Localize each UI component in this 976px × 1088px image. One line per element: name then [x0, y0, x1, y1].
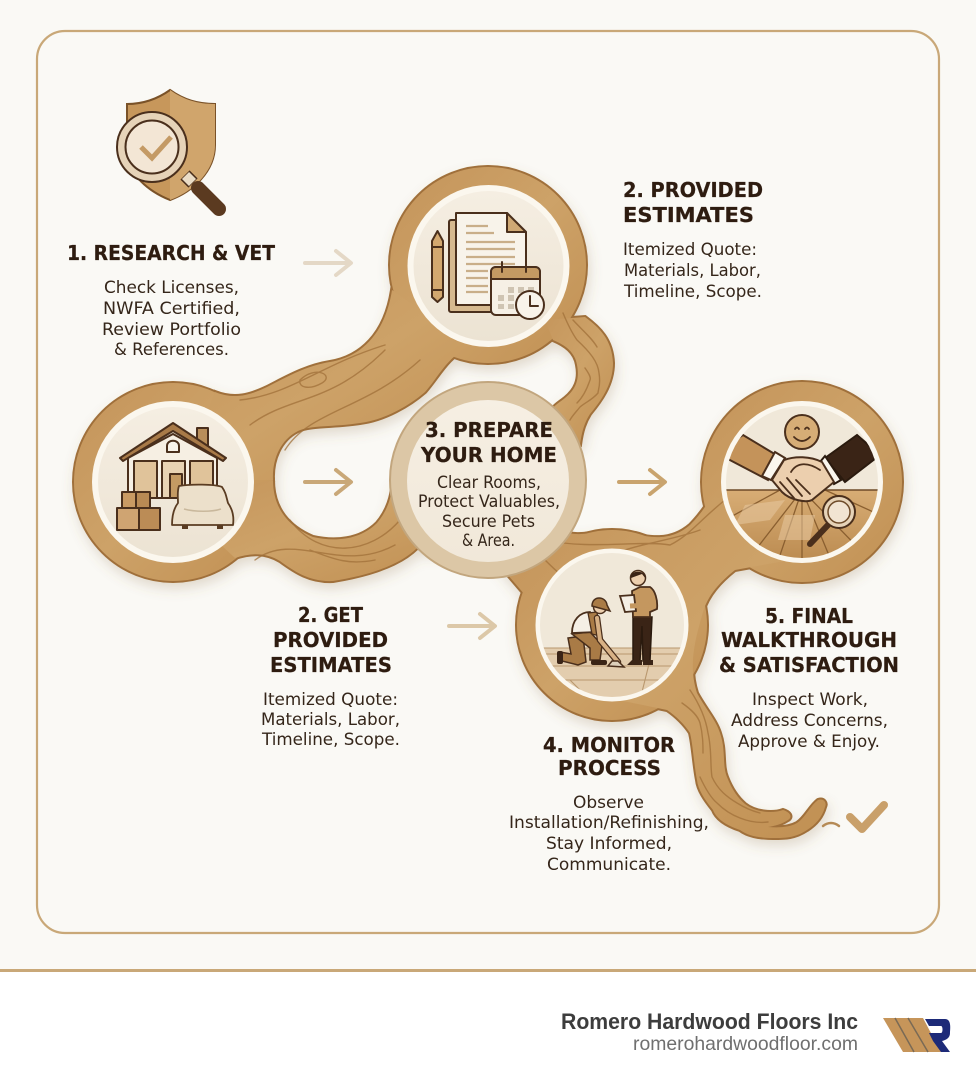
step 3 circle: prepare your home: YOUR HOME — [420, 443, 557, 467]
arrow: house to prepare — [305, 470, 351, 494]
footer background — [0, 971, 976, 1088]
text: get provided estimates details: Materials, Labor, — [261, 710, 400, 729]
final walkthrough icon circle: handshake — [720, 400, 884, 570]
heading: provided estimates: 2. PROVIDED — [623, 178, 763, 202]
monitor icon circle: installer and homeowner — [536, 548, 688, 702]
text: monitor process details: Installation/Refinishing, — [509, 813, 709, 832]
footer website: romerohardwoodfloor.com — [633, 1033, 858, 1055]
heading: final walkthrough and satisfaction: WALKTHROUGH — [721, 628, 897, 652]
icon: check mark at end of path — [823, 805, 884, 829]
heading: provided estimates — [623, 178, 763, 227]
text: final walkthrough details: Approve & Enjoy. — [738, 732, 880, 751]
heading: final walkthrough and satisfaction — [719, 604, 899, 677]
text: final walkthrough details: Inspect Work, — [752, 690, 868, 709]
text: research and vet details: Check Licenses, — [104, 278, 239, 297]
heading: monitor process — [543, 733, 675, 780]
step 3 circle: prepare your home: & Area. — [462, 531, 515, 550]
text: final walkthrough details — [731, 690, 888, 751]
text: provided estimates details: Timeline, Scope. — [623, 282, 762, 301]
text: research and vet details: Review Portfolio — [102, 320, 241, 339]
text: get provided estimates details — [261, 690, 400, 749]
footer company name: Romero Hardwood Floors Inc — [561, 1009, 858, 1034]
text: prepare your home details: Clear Rooms, — [437, 473, 541, 492]
text: provided estimates details: Itemized Quote: — [623, 240, 757, 259]
wood path connecting all steps — [74, 167, 902, 838]
heading: monitor process: 4. MONITOR — [543, 733, 675, 757]
step 1 icon: shield and magnifying glass — [117, 90, 219, 209]
step 3 circle: prepare your home: Protect Valuables, — [418, 492, 560, 511]
step 3 circle: prepare your home — [390, 382, 586, 578]
text: get provided estimates details: Itemized Quote: — [263, 690, 398, 709]
house icon circle — [92, 401, 254, 563]
step 3 circle: prepare your home: Secure Pets — [442, 512, 535, 531]
heading: monitor process: PROCESS — [558, 756, 661, 780]
text: research and vet details: & References. — [114, 340, 229, 359]
text: research and vet details: NWFA Certified, — [103, 299, 240, 318]
text: provided estimates details — [623, 240, 762, 301]
text: research and vet details — [102, 278, 241, 359]
footer divider — [0, 969, 976, 972]
heading: get provided estimates: ESTIMATES — [270, 653, 392, 677]
footer logo — [883, 1018, 950, 1052]
step 2 icon circle: documents and calendar — [408, 185, 570, 347]
text: monitor process details — [509, 793, 709, 874]
arrow: research to estimates — [305, 251, 351, 275]
heading: research and vet: 1. RESEARCH & VET — [67, 241, 275, 265]
arrow: estimates to monitor — [449, 614, 495, 638]
heading: final walkthrough and satisfaction: & SATISFACTION — [719, 653, 899, 677]
heading: get provided estimates: 2. GET — [298, 603, 363, 627]
text: monitor process details: Observe — [573, 793, 644, 812]
arrow: prepare to final — [619, 470, 665, 494]
heading: prepare your home: 3. PREPARE — [425, 418, 553, 442]
heading: get provided estimates: PROVIDED — [273, 628, 388, 652]
heading: get provided estimates — [270, 603, 392, 677]
text: final walkthrough details: Address Concerns, — [731, 711, 888, 730]
text: monitor process details: Communicate. — [547, 855, 671, 874]
text: provided estimates details: Materials, Labor, — [624, 261, 761, 280]
text: get provided estimates details: Timeline, Scope. — [261, 730, 400, 749]
heading: final walkthrough and satisfaction: 5. FINAL — [765, 604, 853, 628]
text: monitor process details: Stay Informed, — [546, 834, 672, 853]
frame panel — [37, 31, 939, 933]
heading: provided estimates: ESTIMATES — [623, 203, 754, 227]
